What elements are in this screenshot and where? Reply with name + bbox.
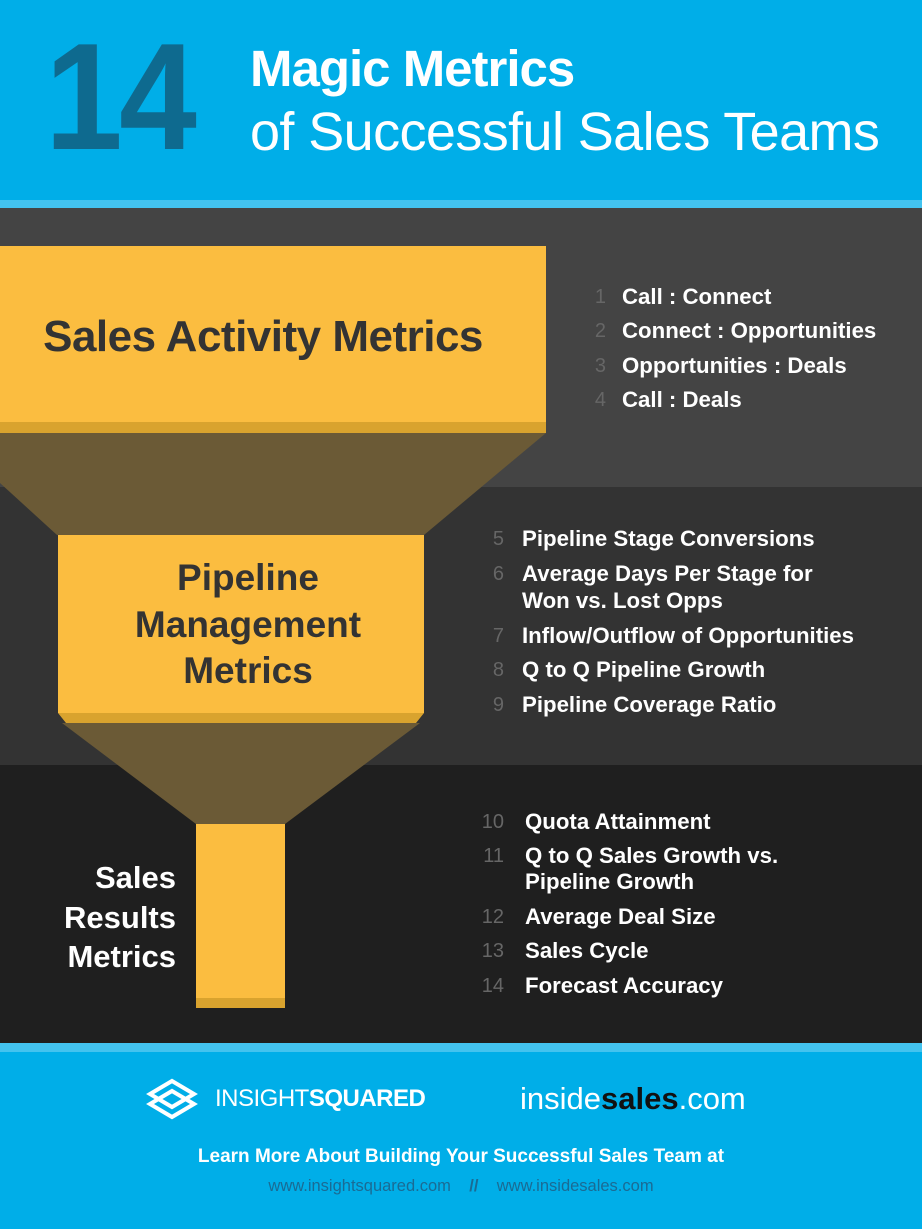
header band — [0, 0, 922, 208]
heading: sales activity metrics: Sales Activity Metrics — [43, 312, 483, 361]
footer call to action: Learn More About Building Your Successful Sales Team at — [198, 1146, 724, 1167]
list: activity metrics: Opportunities : Deals — [622, 353, 847, 378]
list: activity metrics: 3 — [595, 355, 606, 377]
title — [250, 40, 879, 162]
list: pipeline metrics: 6 — [493, 563, 504, 585]
list: pipeline metrics: Q to Q Pipeline Growth — [522, 657, 765, 682]
list: pipeline metrics: 8 — [493, 659, 504, 681]
list: results metrics: Q to Q Sales Growth vs. — [525, 843, 778, 868]
list: activity metrics: Call : Deals — [622, 387, 742, 412]
list: pipeline metrics: Pipeline Coverage Ratio — [522, 692, 776, 717]
list: pipeline metrics: Average Days Per Stage for — [522, 561, 813, 586]
list: results metrics: Quota Attainment — [525, 809, 711, 834]
heading: pipeline management metrics: Pipeline — [177, 557, 319, 598]
list: activity metrics: 1 — [595, 286, 606, 308]
list: pipeline metrics: 7 — [493, 625, 504, 647]
list: pipeline metrics: 9 — [493, 694, 504, 716]
list: results metrics — [482, 809, 778, 998]
logo: insidesales.com: insidesales.com — [520, 1081, 746, 1116]
list: pipeline metrics: Pipeline Stage Conversions — [522, 526, 815, 551]
heading: sales results metrics: Results — [64, 900, 176, 934]
big number 14: 14 — [45, 12, 193, 182]
footer urls: www.insightsquared.com // www.insidesales.com — [268, 1177, 654, 1195]
list: results metrics: 10 — [482, 811, 504, 833]
list: activity metrics: 2 — [595, 320, 606, 342]
heading: sales results metrics: Metrics — [67, 939, 176, 974]
list: results metrics: Average Deal Size — [525, 904, 716, 929]
title: Magic Metrics — [250, 40, 574, 97]
list: results metrics: 14 — [482, 975, 504, 997]
list: pipeline metrics: Inflow/Outflow of Opportunities — [522, 623, 854, 648]
title: of Successful Sales Teams — [250, 102, 879, 162]
list: results metrics: Sales Cycle — [525, 938, 649, 963]
heading: pipeline management metrics: Management — [135, 604, 361, 644]
list: results metrics: 11 — [483, 845, 504, 867]
list: results metrics: Forecast Accuracy — [525, 973, 723, 998]
list: results metrics: 13 — [482, 940, 504, 962]
logo: insightsquared: INSIGHTSQUARED — [215, 1085, 425, 1112]
list: pipeline metrics: Won vs. Lost Opps — [522, 588, 723, 613]
logo: insightsquared — [146, 1078, 425, 1120]
list: activity metrics: Call : Connect — [622, 284, 771, 309]
list: pipeline metrics — [493, 526, 854, 717]
list: activity metrics: 4 — [595, 389, 606, 411]
footer band — [0, 1043, 922, 1229]
section backgrounds — [0, 208, 922, 487]
list: activity metrics: Connect : Opportunities — [622, 318, 876, 343]
list: pipeline metrics: 5 — [493, 528, 504, 550]
list: results metrics: Pipeline Growth — [525, 869, 694, 894]
heading: pipeline management metrics — [135, 557, 361, 691]
list: results metrics: 12 — [482, 906, 504, 928]
heading: sales results metrics: Sales — [95, 860, 176, 895]
heading: pipeline management metrics: Metrics — [183, 650, 313, 691]
heading: sales results metrics — [64, 860, 176, 974]
list: activity metrics — [595, 284, 876, 412]
